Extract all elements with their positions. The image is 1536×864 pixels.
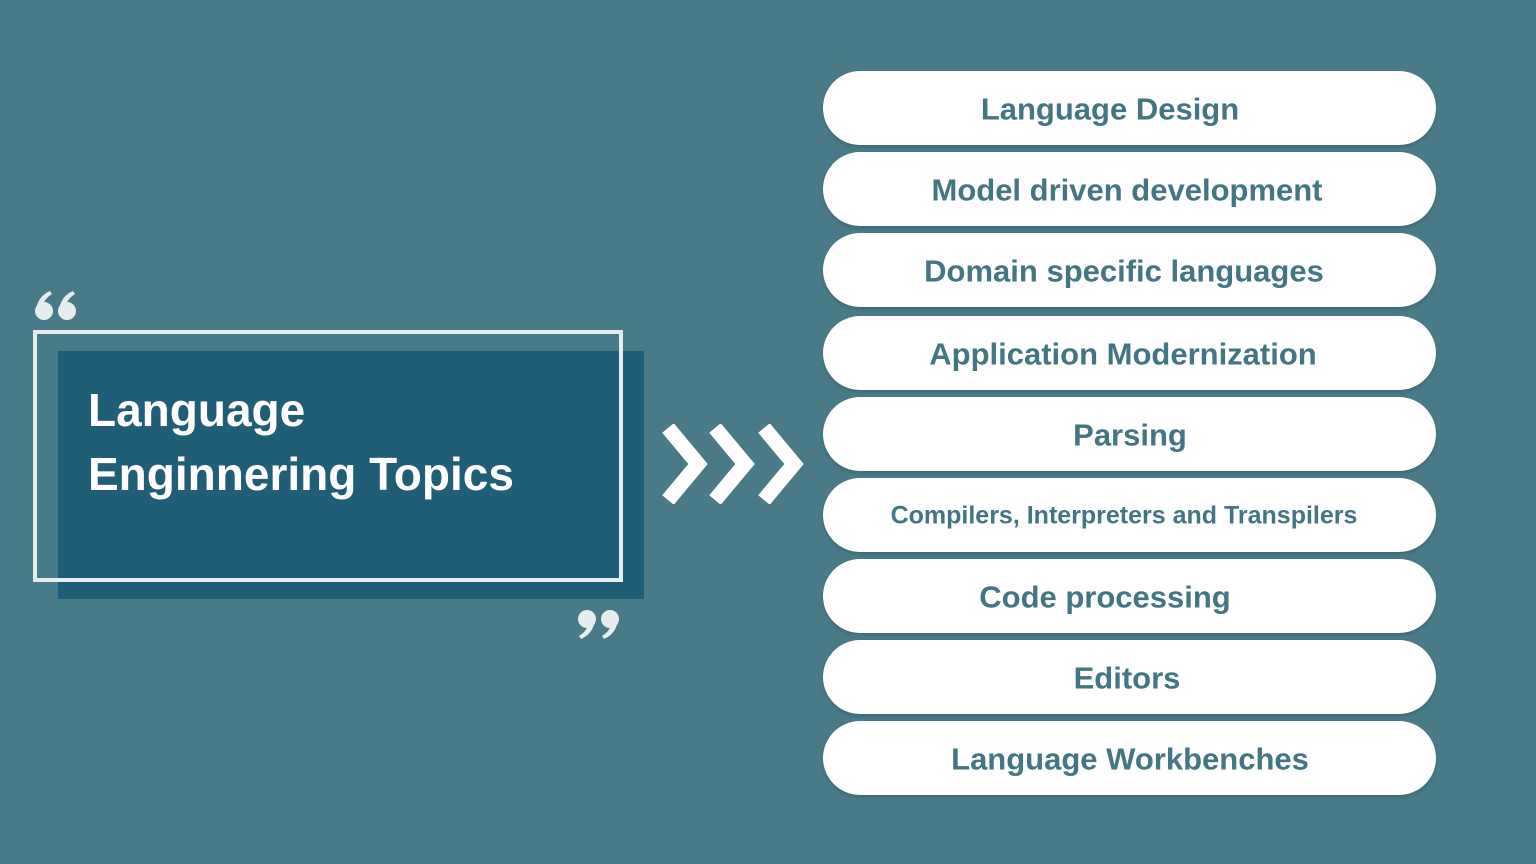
pill: Editors: Editors (1074, 660, 1180, 695)
pill: Parsing (823, 397, 1436, 471)
arrow: chevrons (662, 424, 804, 504)
pill: Application Modernization (823, 316, 1436, 390)
icon: close quote (578, 610, 619, 639)
pill: Language Workbenches: Language Workbenches (951, 741, 1309, 776)
pill: Language Design: Language Design (981, 91, 1239, 126)
pill: Code processing (823, 559, 1436, 633)
pill: Parsing: Parsing (1073, 417, 1187, 452)
pill: Application Modernization: Application Modernization (929, 336, 1317, 371)
title (88, 384, 514, 500)
frame outline (33, 330, 623, 582)
pill: Code processing: Code processing (979, 579, 1231, 614)
pill: Compilers: Compilers, Interpreters and Transpilers (891, 502, 1357, 530)
pill: Model driven development: Model driven development (931, 172, 1323, 207)
pill: Language Design (823, 71, 1436, 145)
pill: Model driven development (823, 152, 1436, 226)
title: Language (88, 384, 305, 436)
pill: Compilers (823, 478, 1436, 552)
pill: Domain specific languages: Domain specific languages (924, 253, 1324, 288)
title: Enginnering Topics (88, 448, 514, 500)
dark title box (58, 351, 644, 599)
pill: Language Workbenches (823, 721, 1436, 795)
pill: Domain specific languages (823, 233, 1436, 307)
icon: open quote (35, 291, 76, 320)
pill: Editors (823, 640, 1436, 714)
